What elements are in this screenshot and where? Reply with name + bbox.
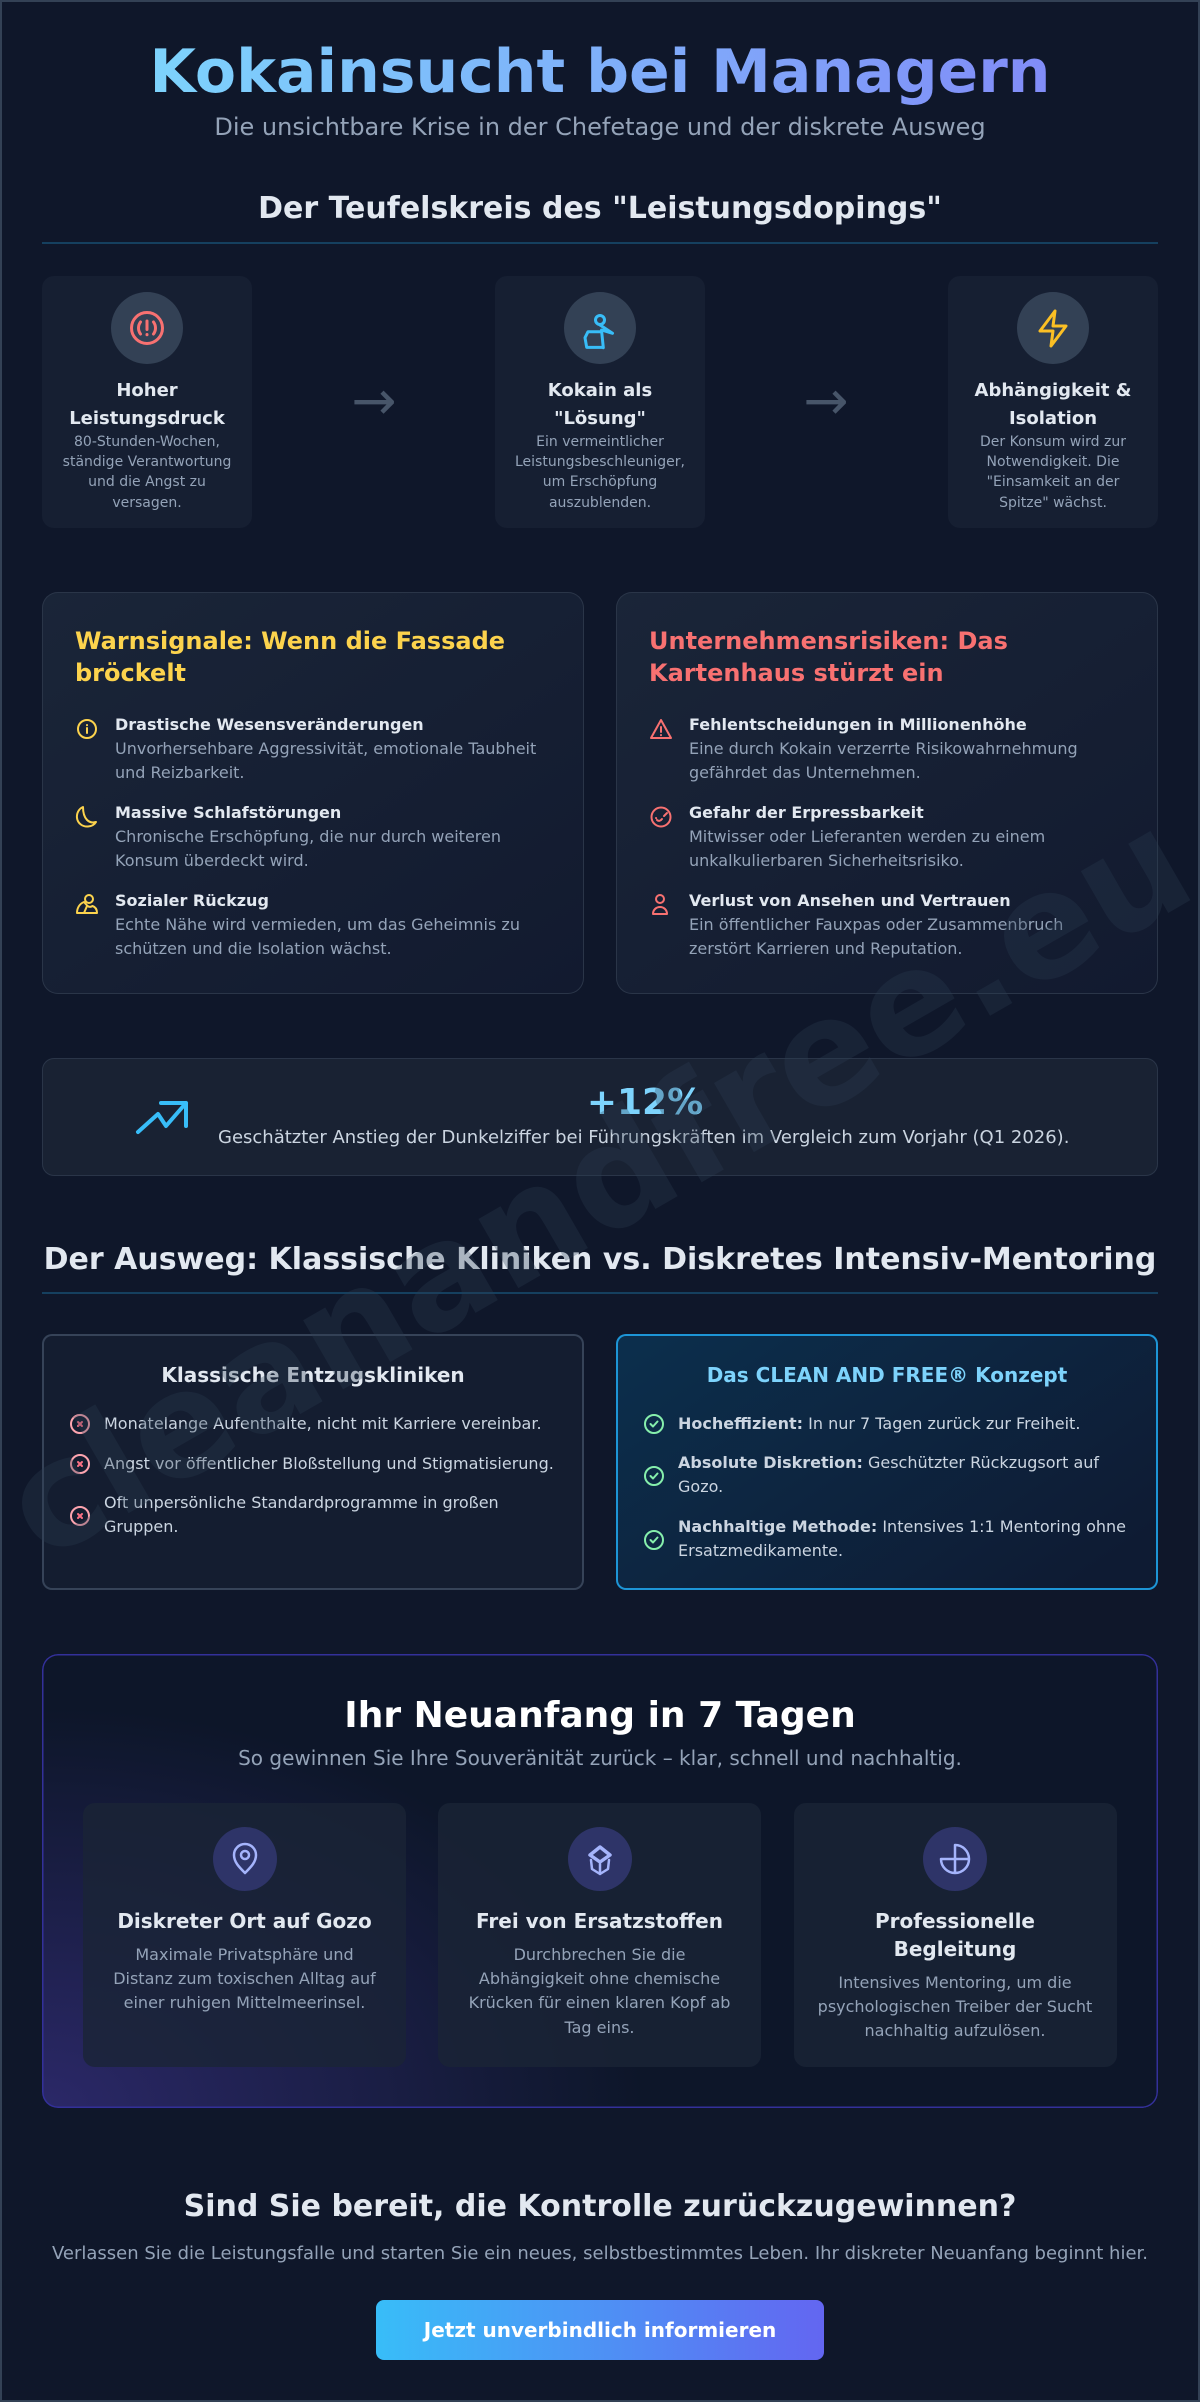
icon: map pin	[212, 1827, 276, 1891]
icon: cross	[70, 1414, 90, 1434]
icon: moon	[76, 806, 97, 828]
card: Professionelle Begleitung	[794, 1803, 1116, 2067]
panel: Unternehmensrisiken	[616, 592, 1158, 994]
step title: "Lösung"	[554, 408, 646, 429]
step text: 80-Stunden-Wochen,	[74, 434, 220, 450]
card title: Professionelle	[875, 1909, 1035, 1933]
icon: warning triangle	[650, 719, 672, 739]
step text	[980, 434, 1126, 511]
heading: Teufelskreis: Der Teufelskreis des "Leistungsdopings"	[258, 191, 942, 226]
step title	[974, 380, 1131, 429]
step text	[515, 434, 685, 511]
card text: Durchbrechen Sie die	[514, 1945, 685, 1964]
heading: Ausweg: Der Ausweg: Klassische Kliniken vs. Diskretes Intensiv-Mentoring	[44, 1242, 1156, 1277]
item: Fehlentscheidungen: Fehlentscheidungen in Millionenhöhe	[689, 715, 1027, 734]
step title: Isolation	[1009, 408, 1097, 429]
step text: Spitze" wächst.	[999, 495, 1107, 511]
stat text: Geschätzter Anstieg der Dunkelziffer bei Führungskräften im Vergleich zum Vorjahr (Q1 2026).	[218, 1127, 1069, 1148]
panel heading	[649, 627, 1008, 687]
step title: Kokain als	[548, 380, 652, 401]
icon: face	[650, 806, 672, 828]
icon: withdrawn person	[76, 894, 98, 914]
card text: Maximale Privatsphäre und	[135, 1945, 354, 1964]
icon: pie	[923, 1827, 987, 1891]
list item 3	[644, 1517, 1126, 1560]
title: Kokainsucht bei Managern	[149, 37, 1051, 107]
CTA button: Jetzt unverbindlich informieren	[424, 2318, 776, 2342]
icon: alert ring	[111, 292, 183, 364]
step text: Leistungsbeschleuniger,	[515, 454, 685, 470]
item: Erpressbarkeit	[689, 803, 1045, 870]
arrow 2: →	[803, 369, 849, 432]
item: Erpressbarkeit: Gefahr der Erpressbarkeit	[689, 803, 924, 822]
panel: statistic	[42, 1058, 1158, 1176]
step text: auszublenden.	[549, 495, 651, 511]
item: Schlafstörungen: Massive Schlafstörungen	[115, 803, 341, 822]
panel: step 1 Hoher Leistungsdruck	[42, 276, 252, 528]
CTA heading: Sind Sie bereit, die Kontrolle zurückzugewinnen?	[184, 2189, 1016, 2224]
list item 3	[70, 1493, 499, 1536]
item: Fehlentscheidungen	[689, 715, 1078, 782]
step title: Abhängigkeit &	[975, 380, 1131, 401]
card text: Abhängigkeit ohne chemische	[479, 1969, 720, 1988]
panel heading: Ihr Neuanfang in 7 Tagen	[344, 1695, 856, 1736]
step title: Leistungsdruck	[69, 408, 225, 429]
panel: step 2 Kokain	[495, 276, 705, 528]
card text: Distanz zum toxischen Alltag auf	[113, 1969, 376, 1988]
icon: check	[644, 1414, 664, 1434]
panel heading: Klassische Entzugskliniken	[161, 1363, 465, 1387]
item: Schlafstörungen: Konsum überdeckt wird.	[115, 851, 309, 870]
step text: ständige Verantwortung	[63, 454, 231, 470]
card title: Begleitung	[894, 1937, 1016, 1961]
item: Sozialer Rückzug	[115, 891, 520, 958]
icon: box	[568, 1827, 632, 1891]
step text: versagen.	[112, 495, 182, 511]
card: Diskreter Ort	[83, 1803, 406, 2067]
card text	[113, 1945, 376, 2012]
item text: Oft unpersönliche Standardprogramme in großen	[104, 1493, 499, 1512]
card text: nachhaltig aufzulösen.	[864, 2021, 1046, 2040]
icon: trending up	[136, 1100, 188, 1134]
arrow 1: →	[351, 369, 397, 432]
item: Schlafstörungen: Chronische Erschöpfung, die nur durch weiteren	[115, 827, 501, 846]
card text: Tag eins.	[564, 2018, 635, 2037]
item: Verlust von Ansehen: Verlust von Ansehen und Vertrauen	[689, 891, 1011, 910]
icon: seated figure	[564, 292, 636, 364]
icon: info	[77, 719, 97, 739]
step text	[63, 434, 231, 511]
panel heading: Das CLEAN AND FREE® Konzept	[707, 1363, 1067, 1387]
list item 2	[70, 1454, 554, 1474]
icon: lightning bolt	[1017, 292, 1089, 364]
step text: "Einsamkeit an der	[987, 474, 1119, 490]
panel heading: Warnsignale: Wenn die Fassade	[75, 627, 505, 655]
card title: Frei von Ersatzstoffen	[476, 1909, 723, 1933]
step text: Notwendigkeit. Die	[987, 454, 1119, 470]
panel heading	[75, 627, 505, 687]
step title: Hoher	[116, 380, 178, 401]
card text	[794, 1971, 1116, 2044]
item: Sozialer Rückzug: Echte Nähe wird vermieden, um das Geheimnis zu	[115, 915, 520, 934]
CTA text: Verlassen Sie die Leistungsfalle und starten Sie ein neues, selbstbestimmtes Leben. Ihr diskreter Neuanfang beginnt hier.	[52, 2243, 1148, 2264]
panel heading: bröckelt	[75, 659, 186, 687]
panel subtitle: So gewinnen Sie Ihre Souveränität zurück – klar, schnell und nachhaltig.	[238, 1746, 962, 1770]
card title: Diskreter Ort auf Gozo	[117, 1909, 372, 1933]
card text	[469, 1945, 730, 2037]
card text: einer ruhigen Mittelmeerinsel.	[124, 1993, 365, 2012]
CTA button	[376, 2300, 824, 2360]
panel: CLEAN AND FREE Konzept	[616, 1334, 1158, 1590]
item: Sozialer Rückzug: schützen und die Isolation wächst.	[115, 939, 392, 958]
item: Fehlentscheidungen: gefährdet das Unternehmen.	[689, 763, 921, 782]
step text: und die Angst zu	[88, 474, 206, 490]
panel: Warnsignale	[42, 592, 584, 994]
item text: Absolute Diskretion: Geschützter Rückzugsort auf	[678, 1453, 1099, 1472]
card text: Krücken für einen klaren Kopf ab	[469, 1993, 730, 2012]
item text: Angst vor öffentlicher Bloßstellung und Stigmatisierung.	[104, 1454, 554, 1473]
item text: Nachhaltige Methode: Intensives 1:1 Mentoring ohne	[678, 1517, 1126, 1536]
icon: cross	[70, 1506, 90, 1526]
icon: cross	[70, 1454, 90, 1474]
item: Sozialer Rückzug: Sozialer Rückzug	[115, 891, 269, 910]
step text: Ein vermeintlicher	[536, 434, 664, 450]
panel: step 3 Abhaengigkeit	[948, 276, 1158, 528]
step title	[548, 380, 652, 429]
panel: Klassische Entzugskliniken	[42, 1334, 584, 1590]
list item 1	[644, 1414, 1080, 1434]
item: Wesensveränderungen: Drastische Wesensveränderungen	[115, 715, 424, 734]
item text: Ersatzmedikamente.	[678, 1541, 843, 1560]
card title	[794, 1907, 1116, 1963]
item: Verlust von Ansehen: zerstört Karrieren und Reputation.	[689, 939, 963, 958]
card text: psychologischen Treiber der Sucht	[818, 1997, 1092, 2016]
step text: um Erschöpfung	[543, 474, 657, 490]
card text: Intensives Mentoring, um die	[838, 1973, 1072, 1992]
item: Fehlentscheidungen: Eine durch Kokain verzerrte Risikowahrnehmung	[689, 739, 1078, 758]
step title	[69, 380, 226, 429]
list item 2	[644, 1453, 1100, 1496]
item text: Monatelange Aufenthalte, nicht mit Karriere vereinbar.	[104, 1414, 542, 1433]
panel: Ihr Neuanfang in 7 Tagen	[42, 1654, 1158, 2108]
item: Verlust von Ansehen: Ein öffentlicher Fauxpas oder Zusammenbruch	[689, 915, 1063, 934]
item text: Gruppen.	[104, 1517, 178, 1536]
item: Erpressbarkeit: Mitwisser oder Lieferanten werden zu einem	[689, 827, 1045, 846]
item text: Gozo.	[678, 1477, 723, 1496]
item text	[678, 1453, 1100, 1496]
subtitle: Die unsichtbare Krise in der Chefetage und der diskrete Ausweg	[214, 113, 986, 141]
icon: check	[644, 1530, 664, 1550]
icon: check	[644, 1466, 664, 1486]
item: Erpressbarkeit: unkalkulierbaren Sicherheitsrisiko.	[689, 851, 964, 870]
card: Frei von Ersatzstoffen	[438, 1803, 761, 2067]
stat value: +12%	[587, 1082, 703, 1123]
item: Verlust von Ansehen	[689, 891, 1063, 958]
item text: Hocheffizient: In nur 7 Tagen zurück zur Freiheit.	[678, 1414, 1080, 1433]
item text	[104, 1493, 499, 1536]
step text: Der Konsum wird zur	[980, 434, 1126, 450]
item: Wesensveränderungen: Unvorhersehbare Aggressivität, emotionale Taubheit	[115, 739, 536, 758]
item: Schlafstörungen	[115, 803, 501, 870]
panel heading: Unternehmensrisiken: Das	[649, 627, 1008, 655]
item: Wesensveränderungen: und Reizbarkeit.	[115, 763, 244, 782]
panel heading: Kartenhaus stürzt ein	[649, 659, 944, 687]
item: Wesensveränderungen	[115, 715, 536, 782]
icon: person	[652, 894, 668, 915]
list item 1	[70, 1414, 542, 1434]
item text	[678, 1517, 1126, 1560]
